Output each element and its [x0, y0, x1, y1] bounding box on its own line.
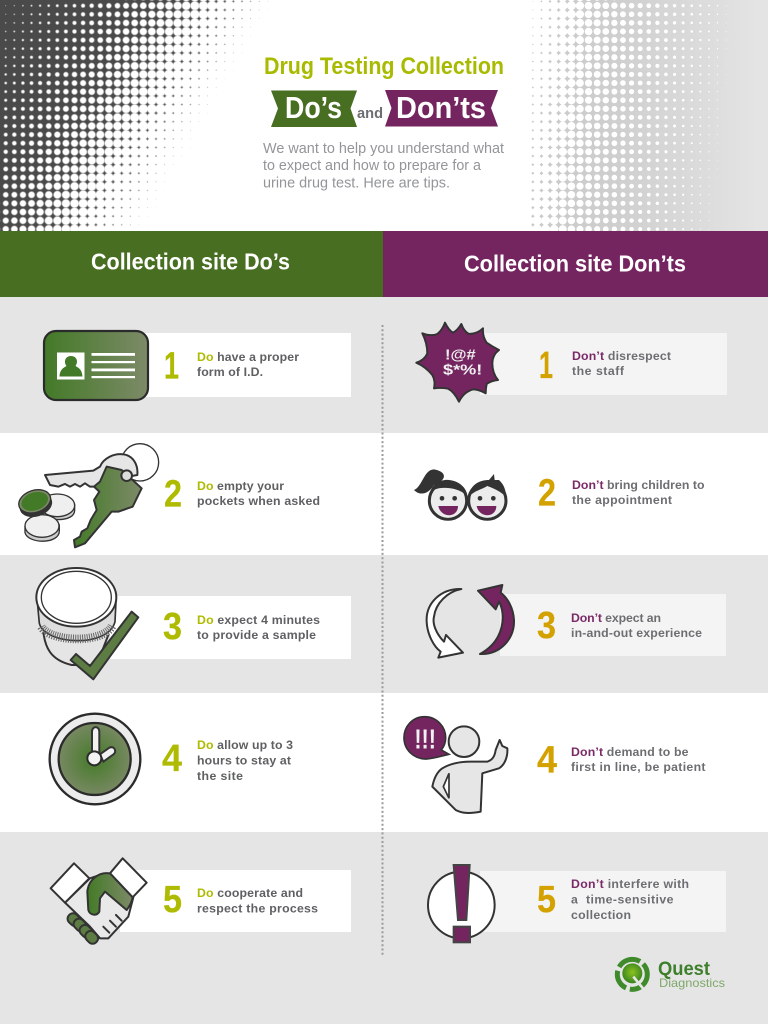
don't 1 — [416, 323, 727, 402]
panel: don'ts — [404, 323, 727, 942]
icon: swearing burst: $*%! — [443, 362, 482, 379]
tip text — [571, 611, 702, 640]
tip text — [197, 350, 299, 379]
logo: Quest Diagnostics: Diagnostics — [659, 976, 725, 990]
tip text: Do empty your — [197, 479, 284, 493]
tip text: Do have a proper — [197, 350, 299, 364]
tip text — [197, 738, 293, 783]
icon: handshake — [51, 858, 147, 946]
tip text: a time-sensitive — [571, 892, 674, 906]
tip text: the appointment — [572, 493, 672, 507]
icon: demanding person — [404, 717, 507, 813]
don't 5 — [428, 865, 726, 942]
banner: Don'ts: Don’ts — [396, 90, 486, 125]
row backgrounds — [0, 297, 768, 1024]
number 4: 4 — [537, 740, 557, 782]
icon: specimen cup with checkmark — [36, 568, 138, 679]
panel header: Collection site Do's: Collection site Do’s — [91, 248, 290, 274]
icon: children — [414, 469, 506, 519]
tip text: Do allow up to 3 — [197, 738, 293, 752]
intro text: We want to help you understand what — [263, 141, 504, 157]
intro text: to expect and how to prepare for a — [263, 158, 482, 174]
tip text: Do expect 4 minutes — [197, 613, 320, 627]
banner: Do's: Do’s — [285, 90, 342, 125]
number 3: 3 — [537, 605, 556, 647]
word: and: and — [357, 105, 383, 122]
icon: cycle arrows — [427, 585, 514, 658]
icon: clock — [50, 714, 140, 804]
number 2: 2 — [164, 474, 182, 516]
tip text: to provide a sample — [197, 628, 316, 642]
intro text: urine drug test. Here are tips. — [263, 176, 450, 192]
number 2: 2 — [538, 472, 556, 514]
panel: do's — [15, 331, 351, 946]
tip text: form of I.D. — [197, 365, 263, 379]
number 1: 1 — [539, 345, 553, 387]
icon: swearing burst: !@# — [445, 346, 476, 363]
tip text: the site — [197, 769, 243, 783]
logo mark — [617, 959, 647, 992]
don't 3 — [427, 585, 726, 658]
tip text: pockets when asked — [197, 494, 320, 508]
do 4 — [50, 714, 293, 804]
tip text — [571, 745, 706, 774]
logo: Quest Diagnostics — [617, 959, 725, 992]
number 5: 5 — [537, 879, 556, 921]
tip text: hours to stay at — [197, 754, 291, 768]
number 5: 5 — [163, 879, 182, 921]
icon: exclamation mark — [428, 865, 495, 942]
don't 4 — [404, 717, 706, 813]
do 1 — [44, 331, 351, 400]
do 5 — [51, 858, 351, 946]
tip text: Don’t bring children to — [572, 478, 705, 492]
tip text: first in line, be patient — [571, 760, 706, 774]
icon: keys and pills — [15, 444, 159, 547]
tip text: Do cooperate and — [197, 886, 303, 900]
tip text: collection — [571, 908, 631, 922]
panel header: Collection site Don'ts: Collection site Don’ts — [464, 250, 686, 276]
tip text: in-and-out experience — [571, 626, 702, 640]
tip text: Don’t interfere with — [571, 877, 689, 891]
tip text: respect the process — [197, 902, 318, 916]
tip text: Don’t expect an — [571, 611, 661, 625]
halftone background right — [531, 0, 768, 231]
tip text: Don’t demand to be — [571, 745, 689, 759]
tip text — [571, 877, 689, 922]
icon: ID card — [44, 331, 148, 400]
tip text — [572, 349, 671, 378]
intro text — [263, 141, 504, 192]
number 1: 1 — [164, 346, 179, 388]
tip text — [572, 478, 705, 507]
number 4: 4 — [162, 738, 182, 780]
tip text — [197, 886, 318, 916]
do 3 — [36, 568, 351, 679]
heading: Drug Testing Collection — [264, 53, 504, 80]
tip text — [197, 479, 320, 508]
tip text: the staff — [572, 364, 625, 378]
don't 2 — [414, 469, 705, 519]
title block — [263, 53, 504, 192]
tip text — [197, 613, 320, 642]
tip text: Don’t disrespect — [572, 349, 671, 363]
number 3: 3 — [163, 606, 182, 648]
do 2 — [15, 444, 320, 547]
wordmark: Quest — [658, 959, 711, 980]
icon: swearing burst — [416, 323, 499, 402]
panel header: Collection site Do's — [0, 231, 383, 297]
halftone background left — [0, 0, 276, 231]
panel header: Collection site Don'ts — [383, 231, 768, 297]
icon: demanding person: !!! — [414, 724, 436, 755]
